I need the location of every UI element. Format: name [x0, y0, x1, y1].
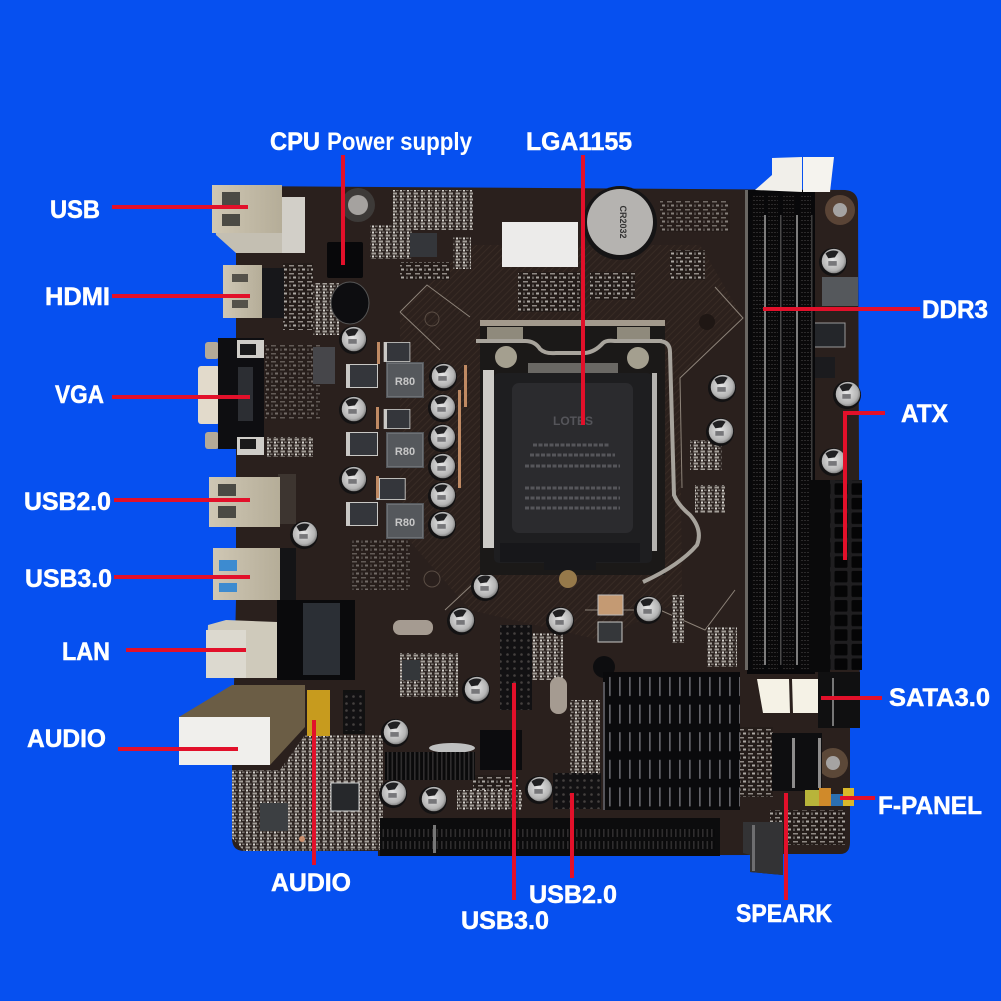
VGA port [198, 338, 264, 455]
large dark capacitor [331, 282, 369, 324]
label: HDMI: HDMI [45, 283, 110, 311]
label: USB2.0 bottom: USB2.0 [529, 881, 617, 909]
label: LAN: LAN [62, 638, 110, 666]
CPU socket: LOTES [553, 414, 593, 428]
black lower connector [818, 672, 860, 728]
label: USB: USB [50, 196, 100, 224]
copper plane areas [400, 245, 743, 640]
socket lever [643, 341, 699, 582]
heat sink [603, 672, 740, 810]
DDR3 slots [745, 190, 815, 674]
HDMI port [223, 265, 284, 318]
USB 3.0 header [500, 625, 532, 710]
other capacitors [290, 248, 861, 814]
white power connector [502, 222, 578, 267]
USB 2.0 port [209, 474, 296, 527]
white DDR3 clips bottom [757, 679, 825, 713]
CMOS battery [583, 186, 657, 260]
LAN transformer [277, 600, 355, 680]
CMOS battery: CR2032 [618, 205, 628, 239]
socket frame [480, 320, 665, 575]
label: CPU Power supply: Power supply [327, 128, 472, 156]
CPU socket [476, 320, 665, 588]
USB 2.0 header [553, 773, 601, 809]
ATX connector [830, 480, 862, 670]
yellow audio header [307, 690, 330, 736]
USB 3.0 port [213, 548, 296, 600]
label: USB3.0 bottom: USB3.0 [461, 907, 549, 935]
pin header [343, 690, 365, 734]
PCIe x1 slot [385, 752, 475, 780]
SATA connectors [772, 733, 822, 791]
motherboard [179, 157, 862, 875]
label: AUDIO left: AUDIO [27, 725, 106, 753]
label: VGA: VGA [55, 381, 104, 409]
silkscreen component clusters [232, 190, 845, 851]
label: USB3.0 left: USB3.0 [25, 565, 112, 593]
label: LGA1155: LGA1155 [526, 128, 632, 156]
LAN port [206, 620, 277, 678]
socket bottom clamp [500, 543, 640, 570]
PCIe x16 slot [380, 818, 720, 856]
VRM capacitors [339, 326, 457, 539]
white DDR3 clips top [755, 157, 834, 192]
crystals [393, 620, 567, 714]
audio port [179, 685, 305, 765]
USB port top [212, 185, 305, 253]
labels [24, 128, 990, 935]
red pointer lines [112, 155, 920, 900]
black shroud beside ATX [810, 480, 830, 672]
fan header [313, 347, 335, 384]
dark inductor [593, 656, 615, 678]
front panel header [805, 788, 854, 806]
label: DDR3: DDR3 [922, 296, 988, 324]
label: AUDIO bottom: AUDIO [271, 869, 351, 897]
label: CPU Power supply [270, 128, 472, 156]
label: USB2.0 left: USB2.0 [24, 488, 111, 516]
label: SATA3.0: SATA3.0 [889, 684, 990, 712]
CPU power connector [327, 242, 363, 278]
label: CPU Power supply: CPU [270, 128, 320, 156]
VRM chokes and MOSFETs [346, 342, 467, 539]
label: F-PANEL: F-PANEL [878, 792, 982, 820]
mounting holes [299, 188, 855, 842]
socket cover [494, 373, 652, 563]
label: SPEARK: SPEARK [736, 900, 832, 928]
label: ATX: ATX [901, 400, 948, 428]
board PCB [232, 186, 860, 875]
bottom slot end latch [743, 822, 783, 875]
ICs [260, 233, 858, 831]
